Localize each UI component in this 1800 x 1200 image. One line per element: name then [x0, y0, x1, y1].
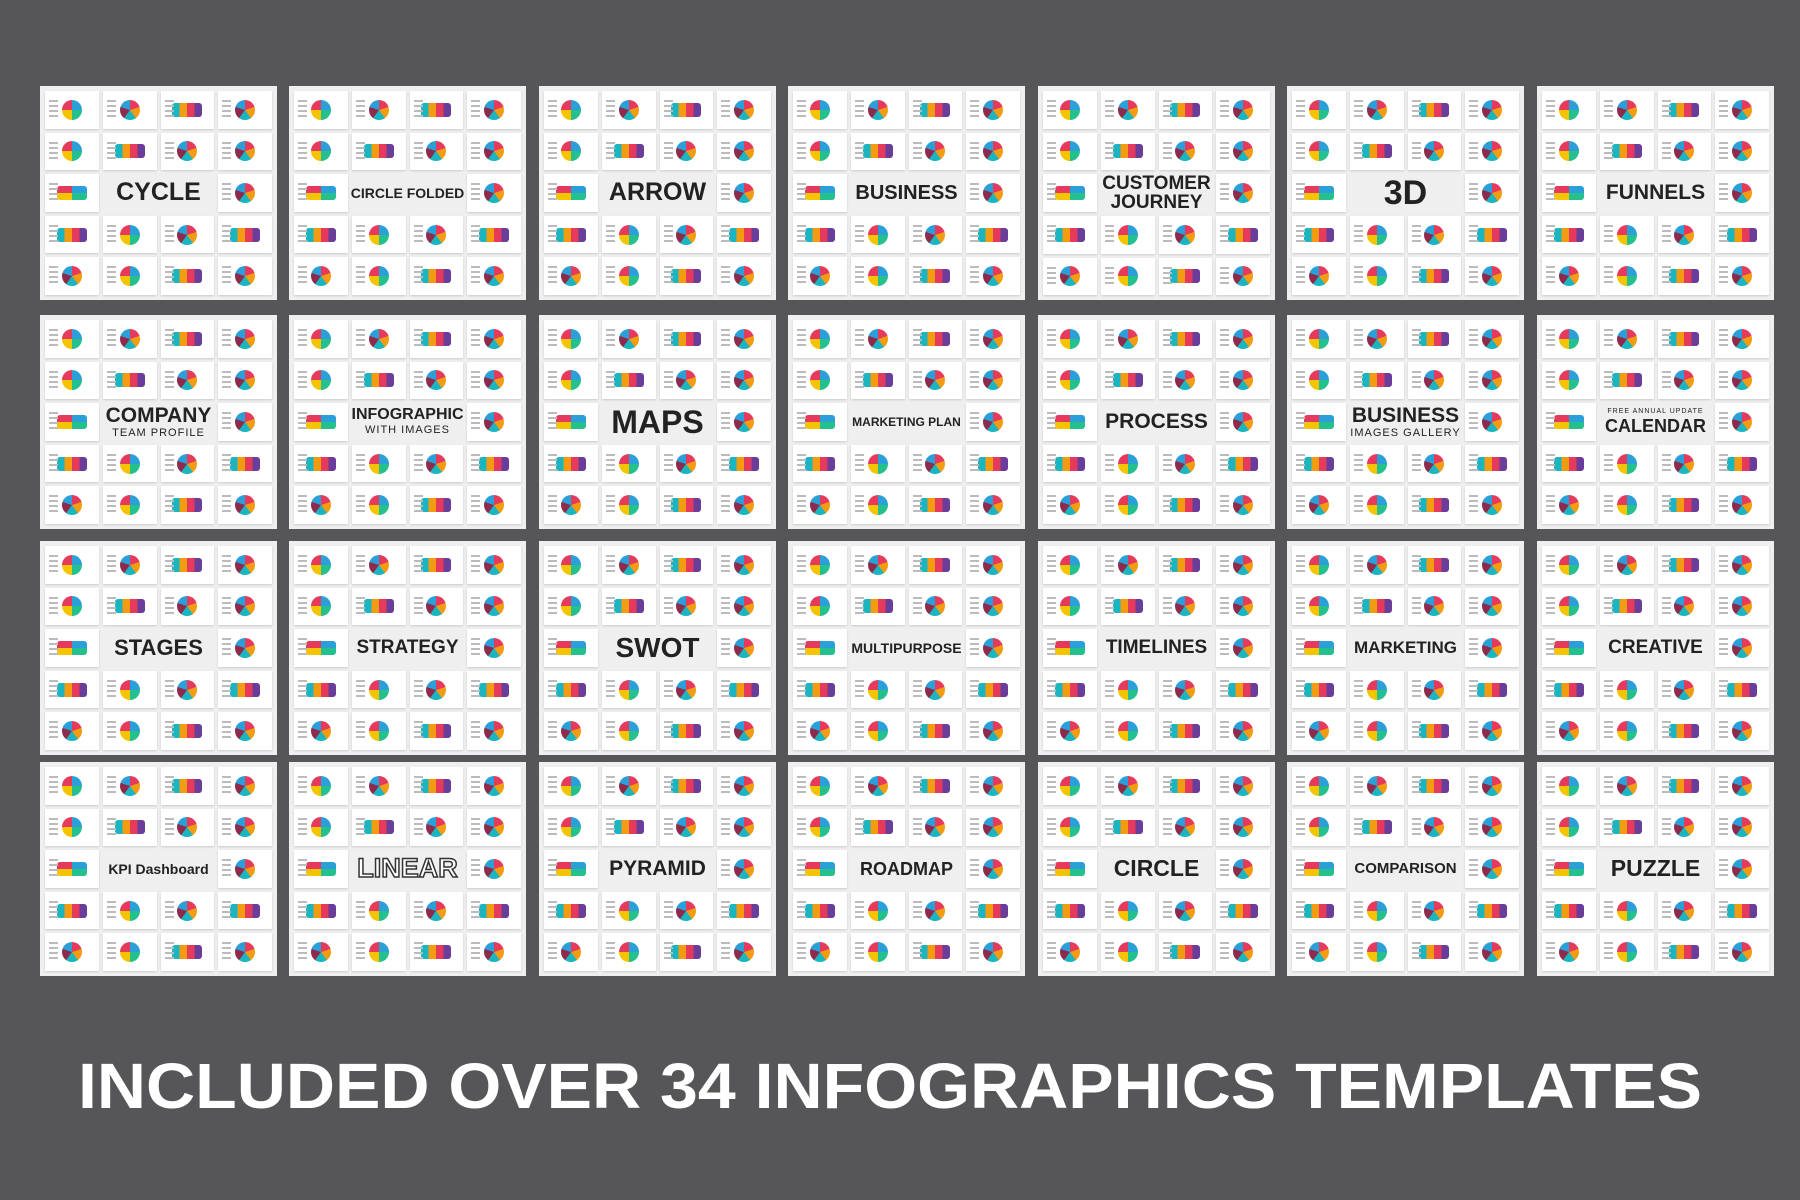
tile: marketing [1287, 541, 1524, 755]
tile: kpi dashboard: KPI Dashboard [108, 861, 209, 877]
tile: customer journey [1038, 86, 1275, 300]
tile: linear: LINEAR [357, 853, 458, 883]
tile: circle [1038, 762, 1275, 976]
tile: multipurpose: MULTIPURPOSE [851, 640, 962, 656]
tile: business [788, 86, 1025, 300]
tile: business images gallery: IMAGES GALLERY [1350, 427, 1461, 439]
tile: infographic with images: WITH IMAGES [365, 424, 450, 436]
tile: circle: CIRCLE [1114, 855, 1199, 881]
tile: linear [289, 762, 526, 976]
tile: business images gallery [1287, 315, 1524, 529]
tile: maps [539, 315, 776, 529]
tile: calendar: CALENDAR [1605, 416, 1706, 436]
tile: company: TEAM PROFILE [112, 427, 205, 439]
tile: process: PROCESS [1105, 410, 1208, 433]
tile: pyramid: PYRAMID [609, 857, 706, 880]
tile: roadmap [788, 762, 1025, 976]
tile: marketing: MARKETING [1354, 638, 1457, 657]
tile: business images gallery: BUSINESS [1352, 404, 1459, 427]
tile: maps: MAPS [611, 404, 704, 440]
tile: marketing plan: MARKETING PLAN [852, 415, 961, 429]
tile: timelines [1038, 541, 1275, 755]
tile: funnels [1537, 86, 1774, 300]
tile: business: BUSINESS [855, 182, 958, 204]
tile: strategy [289, 541, 526, 755]
tile: multipurpose [788, 541, 1025, 755]
tile: calendar: FREE ANNUAL UPDATE [1607, 408, 1704, 415]
tile: creative: CREATIVE [1608, 637, 1703, 658]
tile: company [40, 315, 277, 529]
tile: swot: SWOT [616, 632, 700, 663]
tile: infographic with images: INFOGRAPHIC [352, 406, 464, 423]
tile: arrow [539, 86, 776, 300]
tile: funnels: FUNNELS [1606, 181, 1705, 204]
tile: pyramid [539, 762, 776, 976]
tile: swot [539, 541, 776, 755]
tile: stages: STAGES [114, 635, 203, 660]
tile: marketing plan [788, 315, 1025, 529]
tile: strategy: STRATEGY [356, 637, 459, 658]
tile: 3d [1287, 86, 1524, 300]
tile: company: COMPANY [106, 404, 211, 427]
tile: puzzle: PUZZLE [1611, 855, 1700, 881]
tile: roadmap: ROADMAP [860, 859, 953, 879]
tile: creative [1537, 541, 1774, 755]
tile: stages [40, 541, 277, 755]
tile: arrow: ARROW [609, 178, 706, 206]
tile: kpi dashboard [40, 762, 277, 976]
tile: comparison [1287, 762, 1524, 976]
tile: cycle [40, 86, 277, 300]
tile: timelines: TIMELINES [1106, 637, 1207, 658]
tile: 3d: 3D [1384, 174, 1427, 212]
tile: circle folded: CIRCLE FOLDED [351, 185, 464, 201]
title: INCLUDED OVER 34 INFOGRAPHICS TEMPLATES [78, 1050, 1702, 1122]
tile: process [1038, 315, 1275, 529]
tile: infographic with images [289, 315, 526, 529]
tile: circle folded [289, 86, 526, 300]
tile: calendar [1537, 315, 1774, 529]
tile: customer journey: JOURNEY [1111, 192, 1202, 213]
tile: comparison: COMPARISON [1354, 860, 1457, 877]
tile: cycle: CYCLE [116, 178, 201, 206]
tile: customer journey: CUSTOMER [1102, 173, 1211, 194]
tile: puzzle [1537, 762, 1774, 976]
